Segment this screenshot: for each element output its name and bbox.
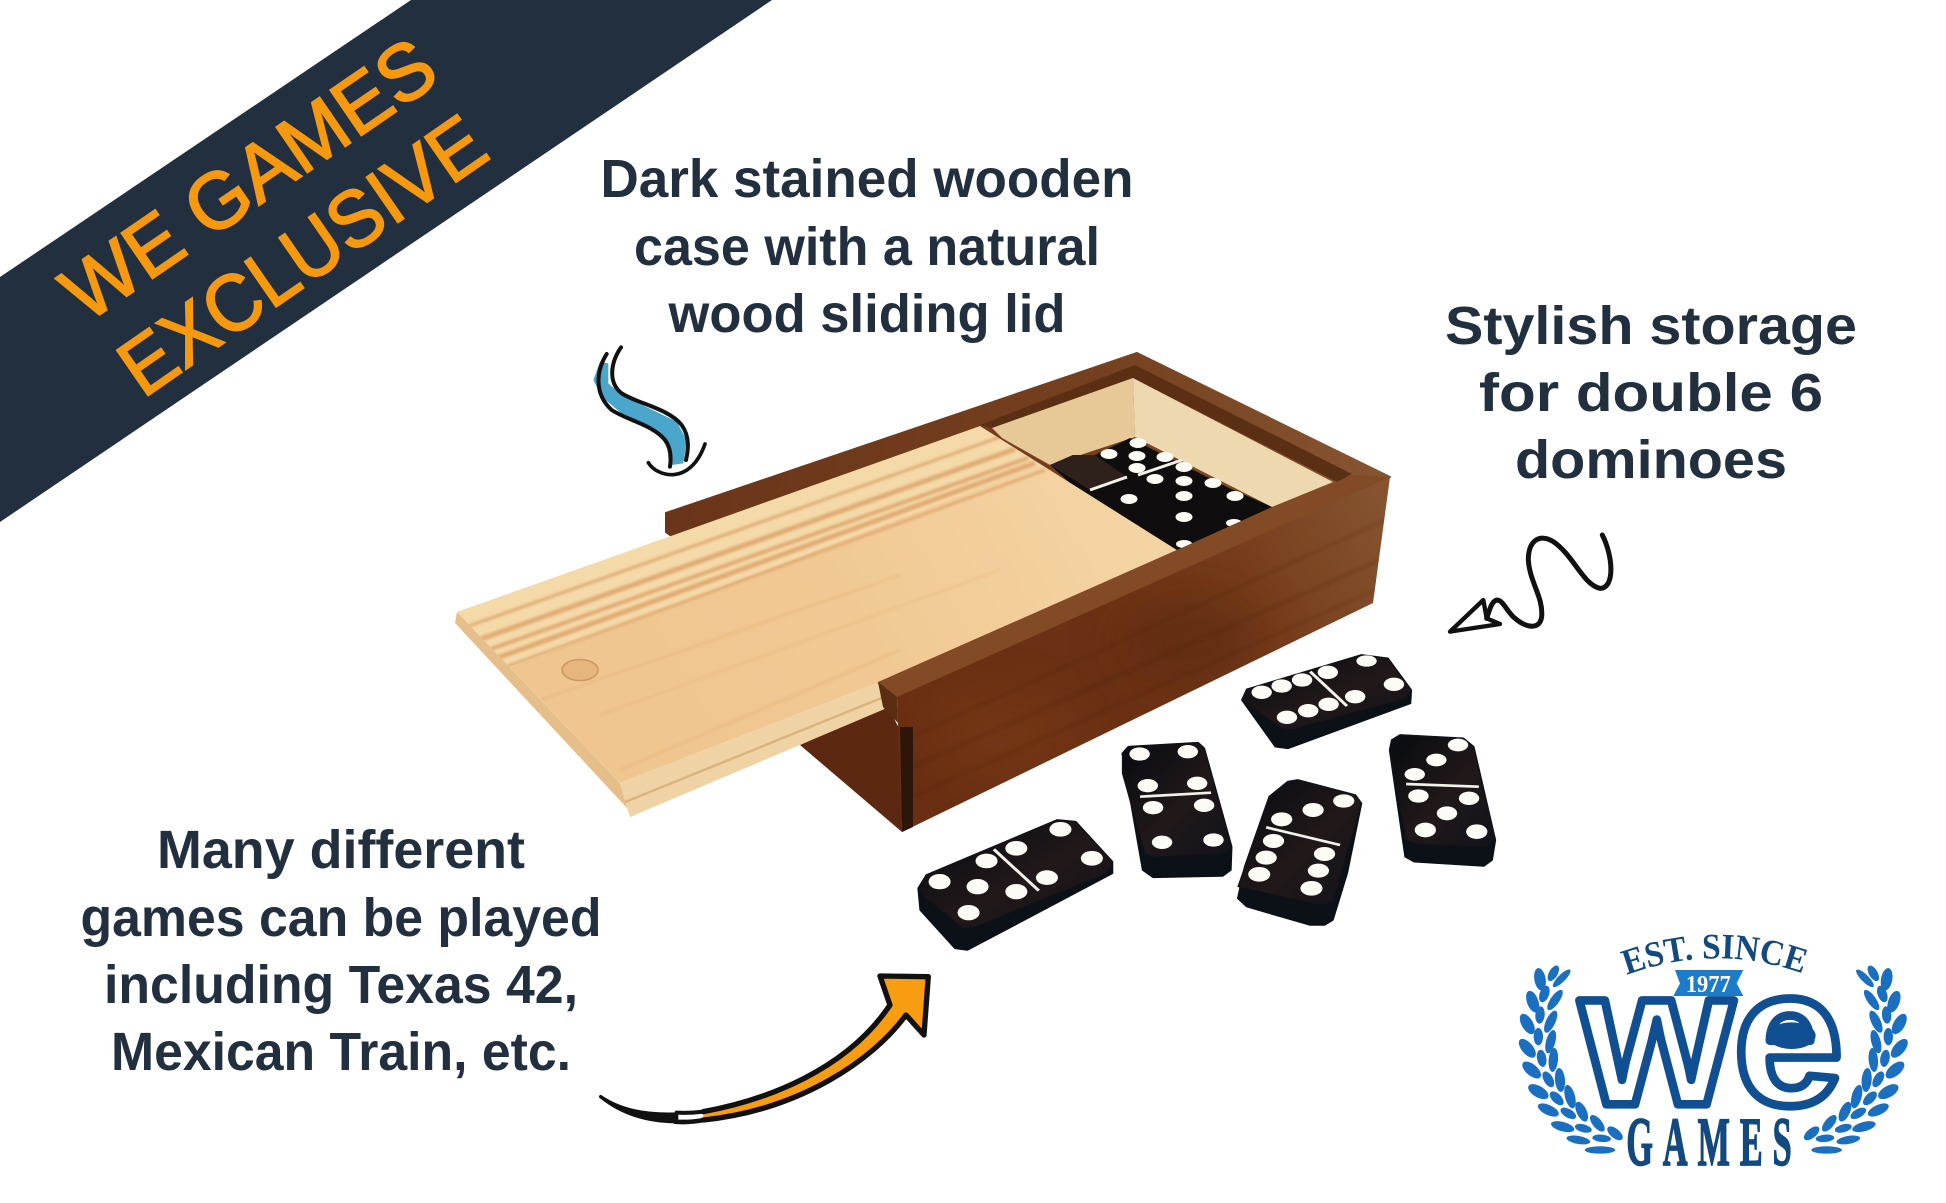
1977 ribbon: 1977 [1686, 972, 1731, 998]
text: dark stained wooden case: case with a natural [634, 217, 1100, 277]
1977 ribbon [1673, 970, 1743, 998]
box rim [666, 353, 1390, 697]
wall end grain [878, 682, 898, 723]
arrow: blue pointing to case [593, 347, 705, 475]
text: dark stained wooden case [600, 149, 1134, 344]
text: stylish storage: dominoes [1515, 430, 1787, 490]
dominoes inside box [1050, 438, 1272, 550]
text: dark stained wooden case: Dark stained wooden [600, 149, 1134, 209]
corner joint [900, 727, 913, 832]
pine back wall [992, 378, 1135, 465]
inner groove [980, 365, 1352, 482]
text: many different games: Many different [157, 820, 525, 880]
text: many different games: Mexican Train, etc. [111, 1022, 571, 1082]
est since text: EST. SINCE [1620, 934, 1807, 975]
banner: WE Games Exclusive [0, 0, 772, 522]
WE mark: we [1579, 926, 1843, 1146]
text: many different games [80, 820, 602, 1082]
text: stylish storage [1445, 296, 1857, 490]
domino: three-six [1238, 780, 1361, 925]
laurel: left [1516, 964, 1625, 1154]
sliding lid top [457, 426, 1177, 783]
banner: WE Games Exclusive: WE GAMES [45, 21, 452, 338]
lid finger hole [562, 660, 598, 680]
text: dark stained wooden case: wood sliding lid [668, 284, 1066, 344]
arrow: orange pointing to dominoes [601, 976, 928, 1122]
loose dominoes [918, 655, 1495, 950]
domino: three-five [1390, 735, 1495, 866]
box front wall face [897, 477, 1390, 832]
games text: GAMES [1626, 1104, 1802, 1180]
banner: WE Games Exclusive: EXCLUSIVE [102, 98, 502, 413]
logo: WE Games [1518, 926, 1908, 1180]
laurel: right [1801, 964, 1911, 1154]
domino: six-four top [1242, 655, 1411, 748]
text: stylish storage: for double 6 [1479, 363, 1823, 423]
text: many different games: games can be played [80, 888, 602, 948]
text: stylish storage: Stylish storage [1445, 296, 1857, 356]
text: many different games: including Texas 42, [104, 955, 578, 1015]
domino: four-four [1122, 743, 1231, 877]
domino: five-four [918, 820, 1112, 950]
arrow: black squiggle pointing to box [1450, 535, 1611, 632]
box front wall top rim [878, 475, 1390, 697]
pine side wall [1133, 378, 1333, 507]
est since text [1620, 934, 1807, 975]
wooden box with sliding lid [455, 353, 1390, 832]
box left end [800, 705, 902, 832]
lid side edges [455, 612, 887, 817]
